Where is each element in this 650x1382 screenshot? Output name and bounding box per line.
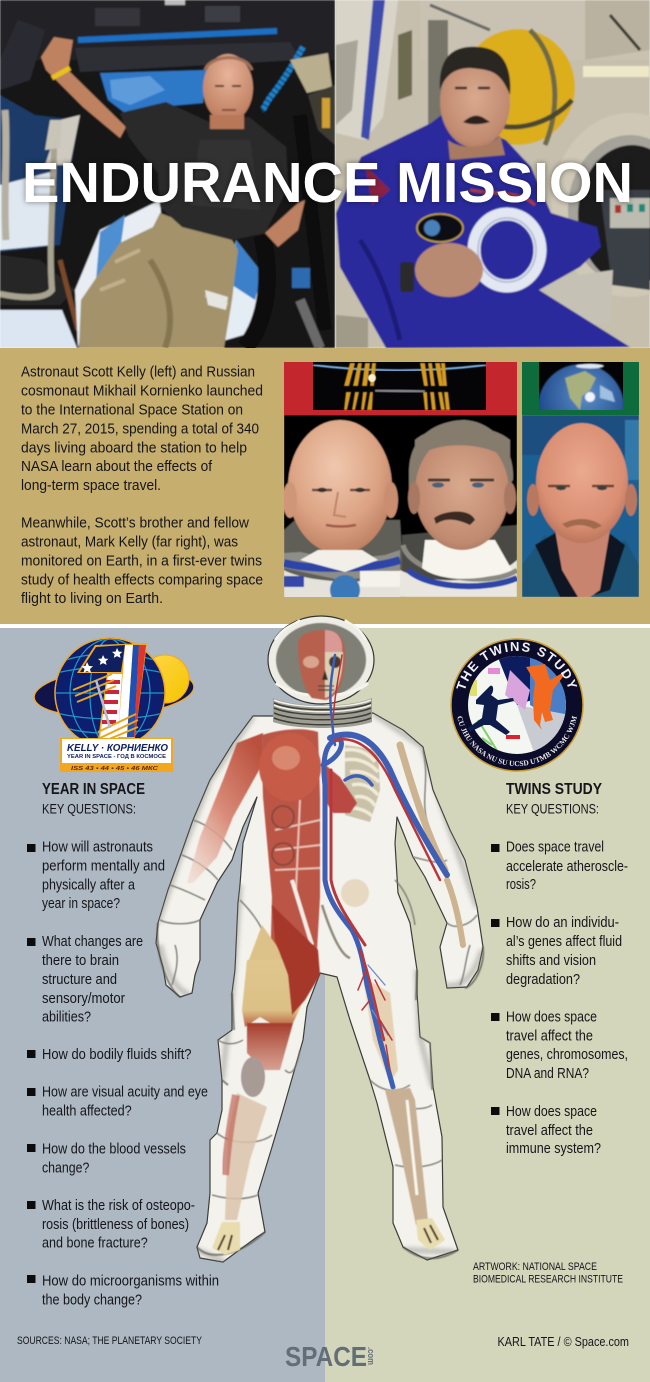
photo: Scott Kelly and Mikhail Kornienko portraits — [283, 415, 517, 605]
text block: intro second paragraph: study of health effects comparing space — [21, 572, 263, 588]
question 1: How will astronauts — [42, 840, 153, 856]
question 4: health affected? — [42, 1104, 132, 1120]
question 4 — [491, 1104, 601, 1157]
earth quadrant — [498, 656, 562, 705]
credit: artwork: ARTWORK: NATIONAL SPACE — [473, 1261, 597, 1273]
text block: intro first paragraph: to the International Space Station on — [21, 402, 243, 418]
question 1 — [491, 840, 628, 893]
badge: Twins Study patch: THE TWINS STUDY — [456, 642, 578, 689]
text block: intro second paragraph: flight to living on Earth. — [21, 591, 163, 607]
bones: right lower leg — [385, 1088, 428, 1225]
question 3: How do bodily fluids shift? — [42, 1047, 192, 1063]
muscles: thigh — [241, 905, 320, 1097]
panel: Twins Study background — [325, 628, 650, 1382]
question 3: travel affect the — [506, 1029, 593, 1045]
title: ENDURANCE MISSION — [22, 151, 633, 215]
heart — [323, 763, 357, 813]
question 3 — [491, 1010, 628, 1082]
name banner — [60, 738, 173, 772]
question 7: the body change? — [42, 1292, 142, 1308]
credit: sources: SOURCES: NASA; THE PLANETARY SOCIETY — [17, 1335, 203, 1347]
text block: intro first paragraph — [21, 365, 263, 494]
question 6: rosis (brittleness of bones) — [42, 1217, 189, 1233]
orbit band — [33, 662, 195, 722]
question 1: Does space travel — [506, 840, 604, 856]
portrait: Mikhail Kornienko — [400, 420, 517, 597]
runner silhouette — [468, 686, 514, 735]
photo: Mark Kelly portrait — [522, 415, 639, 597]
credit: artwork — [473, 1261, 623, 1286]
question 4: How does space — [506, 1104, 597, 1120]
question 7 — [27, 1273, 219, 1308]
icon: station solar arrays — [344, 363, 450, 410]
question 2: abilities? — [42, 1010, 91, 1026]
bones: left foot — [212, 1222, 240, 1255]
icon: Earth — [539, 362, 623, 410]
spacesuit body — [156, 713, 483, 1262]
badge: Twins Study patch: CU JHU NASA NU SU UCSD UTMB WCMC WJM — [458, 716, 577, 766]
question 2: there to brain — [42, 953, 119, 969]
panel: Year in Space background — [0, 628, 325, 1382]
panel: introduction band — [0, 348, 650, 624]
text block: intro second paragraph: monitored on Earth, in a first-ever twins — [21, 554, 262, 570]
question 2: sensory/motor — [42, 991, 125, 1007]
portrait: Scott Kelly — [283, 420, 405, 605]
question 5 — [27, 1141, 186, 1176]
illustration: astronaut suit with anatomy — [156, 616, 483, 1262]
badge: Twins Study patch — [450, 638, 584, 772]
text block: intro second paragraph: astronaut, Mark Kelly (far right), was — [21, 535, 238, 551]
question 2: What changes are — [42, 934, 143, 950]
question 4: travel affect the — [506, 1123, 593, 1139]
bones: right foot — [416, 1218, 445, 1250]
muscles: arm — [187, 733, 263, 883]
neck rings — [273, 698, 372, 728]
question 6: What is the risk of osteopo- — [42, 1198, 195, 1214]
question 2: structure and — [42, 972, 117, 988]
question 1: perform mentally and — [42, 858, 165, 874]
question 2: How do an individu- — [506, 915, 619, 931]
text block: intro second paragraph: Meanwhile, Scott’s brother and fellow — [21, 516, 249, 532]
question 1: rosis? — [506, 877, 536, 893]
name banner: YEAR IN SPACE - ГОД В КОСМОСЕ — [67, 754, 166, 760]
question 1: physically after a — [42, 877, 136, 893]
question 2: al’s genes affect fluid — [506, 934, 622, 950]
list: Twins Study questions — [491, 840, 628, 1157]
badge: Year in Space mission patch — [33, 638, 195, 772]
question 4: How are visual acuity and eye — [42, 1085, 208, 1101]
globe — [55, 638, 165, 748]
name banner: KELLY · КОРНИЕНКО — [67, 743, 168, 754]
subheading: left key questions: KEY QUESTIONS: — [42, 802, 136, 817]
title: ENDURANCE MISSION — [22, 151, 633, 215]
question 2: shifts and vision — [506, 953, 596, 969]
text block: intro second paragraph — [21, 516, 263, 607]
logo: Space.com: SPACE — [285, 1341, 367, 1372]
numeral one with flags — [77, 643, 147, 740]
orange figure — [526, 664, 568, 730]
question 7: How do microorganisms within — [42, 1273, 219, 1289]
question 6: and bone fracture? — [42, 1236, 148, 1252]
header photo: Scott Kelly in the Cupola — [0, 0, 335, 348]
logo: Space.com: .com — [366, 1347, 376, 1365]
pelvis — [322, 879, 369, 958]
text block: intro first paragraph: days living aboard the station to help — [21, 440, 247, 456]
list: Year in Space questions — [27, 840, 219, 1308]
header photo: Mikhail Kornienko — [335, 0, 650, 348]
question 4 — [27, 1085, 208, 1120]
space station — [73, 674, 138, 742]
question 4: immune system? — [506, 1141, 601, 1157]
question 2 — [491, 915, 622, 988]
name banner: ISS 43 • 44 • 45 • 46 МКС — [71, 766, 159, 772]
muscles: chest and abdomen — [247, 729, 321, 972]
panel: green banner with Earth — [522, 362, 639, 415]
question 3: How does space — [506, 1010, 597, 1026]
heading: Twins Study: TWINS STUDY — [506, 781, 602, 798]
right thigh tan tissue — [363, 977, 398, 1083]
question 1: year in space? — [42, 896, 120, 912]
panel: red banner with space station — [284, 362, 517, 415]
question 2 — [27, 934, 143, 1026]
sun — [141, 655, 189, 703]
question 3: DNA and RNA? — [506, 1066, 589, 1082]
question 3: genes, chromosomes, — [506, 1047, 628, 1063]
text block: intro first paragraph: long-term space travel. — [21, 478, 161, 494]
helmet — [268, 616, 374, 704]
circulatory system: blue and red vessels — [323, 655, 463, 1087]
heading: Year in Space: YEAR IN SPACE — [42, 781, 145, 798]
question 1 — [27, 840, 165, 912]
question 1: accelerate atheroscle- — [506, 859, 628, 875]
question 6 — [27, 1198, 195, 1252]
question 5: change? — [42, 1160, 89, 1176]
text block: intro first paragraph: March 27, 2015, spending a total of 340 — [21, 421, 259, 437]
skull and head anatomy — [298, 630, 345, 700]
suit shading — [158, 713, 482, 1262]
text block: intro first paragraph: cosmonaut Mikhail Kornienko launched — [21, 384, 263, 400]
text block: intro first paragraph: NASA learn about the effects of — [21, 459, 213, 475]
text block: intro first paragraph: Astronaut Scott Kelly (left) and Russian — [21, 365, 255, 381]
subheading: right key questions: KEY QUESTIONS: — [506, 802, 599, 817]
question 5: How do the blood vessels — [42, 1141, 186, 1157]
ribs — [345, 745, 380, 822]
bones: left lower leg — [225, 1093, 267, 1220]
question 2: degradation? — [506, 972, 580, 988]
